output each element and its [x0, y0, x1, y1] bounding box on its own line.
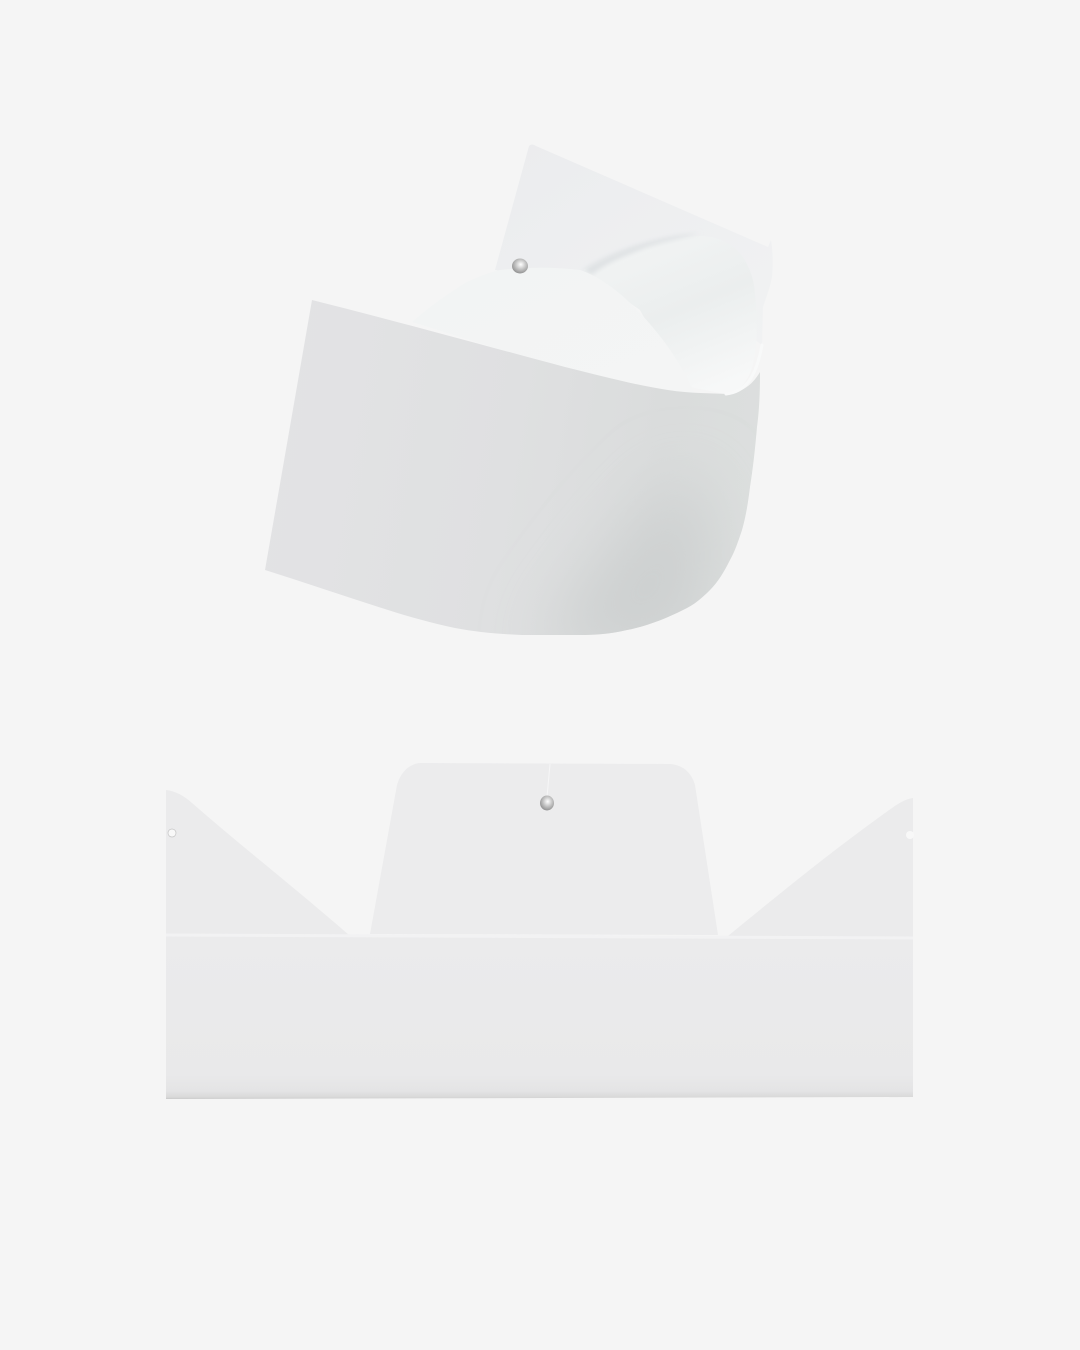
flat: right hole: [906, 831, 914, 839]
flat: left triangle flap: [166, 790, 349, 935]
flat unfolded hat: [166, 763, 914, 1099]
flat: thread: [547, 764, 550, 797]
hat: inner right crown: [583, 236, 757, 394]
flat: center tab: [370, 763, 718, 935]
flat: fold line: [166, 935, 913, 938]
flat: rivet: [540, 796, 554, 810]
illustration canvas: [166, 144, 913, 1099]
hat: band rim: [726, 345, 762, 394]
hat: rivet: [512, 258, 528, 274]
hat: dark crease: [583, 233, 700, 275]
hat: front band: [265, 300, 760, 635]
hat: back panel: [495, 144, 773, 345]
hat: crown dome: [412, 268, 695, 395]
flat: left hole: [168, 829, 176, 837]
flat: lower band: [166, 936, 913, 1099]
folded paper hat: [265, 144, 773, 650]
flat: right triangle flap: [728, 798, 913, 937]
hat: band shadow: [580, 512, 704, 635]
